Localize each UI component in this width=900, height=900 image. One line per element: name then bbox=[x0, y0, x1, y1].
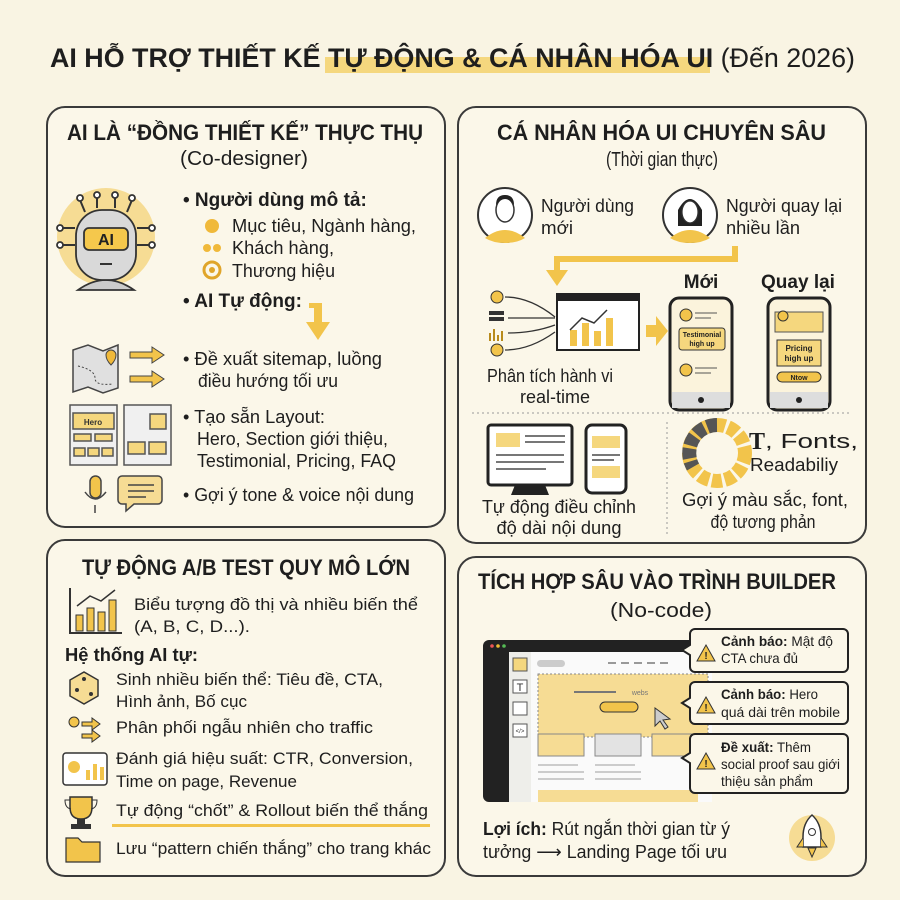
text: variants: Sinh nhiều biến thể: Tiêu đề, CTA, bbox=[116, 670, 383, 689]
icon: trophy bbox=[65, 797, 97, 829]
phone: new bbox=[670, 272, 732, 410]
text: returning user: Người quay lại bbox=[726, 196, 842, 216]
text: variants: Hình ảnh, Bố cục bbox=[116, 692, 247, 711]
heading: builder bbox=[478, 569, 836, 622]
text: layouts: Testimonial, Pricing, FAQ bbox=[197, 451, 396, 471]
icon: AI robot bbox=[57, 188, 155, 290]
callout: hero warning bbox=[682, 682, 848, 724]
text: behaviour analysis bbox=[487, 366, 613, 407]
text: rollout: Tự động “chốt” & Rollout biến thể thắng bbox=[116, 801, 428, 820]
heading: co-designer: AI LÀ “ĐỒNG THIẾT KẾ” THỰC THỤ bbox=[67, 120, 423, 145]
icon: arrows bbox=[130, 347, 164, 387]
builder mockup: </> bbox=[516, 729, 525, 735]
text: distribute: Phân phối ngẫu nhiên cho traffic bbox=[116, 718, 374, 737]
icon: chart bbox=[70, 588, 122, 633]
panel: A/B testing bbox=[47, 540, 445, 876]
callout: hero warning: quá dài trên mobile bbox=[721, 704, 840, 720]
builder mockup: T bbox=[517, 682, 524, 694]
panel: builder integration bbox=[458, 557, 866, 876]
text: sitemap: điều hướng tối ưu bbox=[198, 371, 338, 391]
text: evaluate: Đánh giá hiệu suất: CTR, Conversion, bbox=[116, 749, 413, 768]
text: layouts bbox=[183, 407, 396, 471]
heading: co-designer bbox=[67, 120, 423, 170]
builder mockup bbox=[483, 640, 712, 802]
text: fonts: , Fonts, bbox=[765, 431, 858, 453]
icon: new user bbox=[478, 188, 532, 243]
arrow: to phones bbox=[646, 316, 668, 346]
icon: dice bbox=[70, 672, 98, 704]
text: layouts: • Tạo sẵn Layout: bbox=[183, 407, 325, 427]
text: variants bbox=[116, 670, 383, 711]
text: user describes: • Người dùng mô tả: bbox=[183, 190, 367, 211]
phone: returning: Pricing bbox=[785, 344, 813, 353]
callout: CTA warning bbox=[682, 629, 848, 672]
phone: new: high up bbox=[689, 341, 715, 348]
text: fonts: Gợi ý màu sắc, font, bbox=[682, 489, 848, 510]
builder mockup: webs bbox=[631, 690, 649, 697]
title: AI HỖ TRỢ THIẾT KẾ TỰ ĐỘNG & CÁ NHÂN HÓA UI (Đến 2026) bbox=[50, 42, 855, 73]
callout: suggestion bbox=[682, 734, 848, 793]
callout: hero warning: ! bbox=[704, 703, 708, 714]
text: evaluate bbox=[116, 749, 413, 791]
text: benefit: Lợi ích: Rút ngắn thời gian từ ý bbox=[483, 818, 730, 839]
heading: personalization: CÁ NHÂN HÓA UI CHUYÊN SÂU bbox=[497, 120, 826, 145]
text: AI system: Hệ thống AI tự: bbox=[65, 645, 198, 665]
heading: builder: TÍCH HỢP SÂU VÀO TRÌNH BUILDER bbox=[478, 569, 836, 594]
callout: hero warning: Cảnh báo: Hero bbox=[721, 686, 818, 702]
icon: distribute bbox=[69, 717, 100, 742]
text: behaviour analysis: real-time bbox=[520, 387, 590, 407]
text: chart: (A, B, C, D...). bbox=[134, 617, 250, 636]
text: auto length bbox=[482, 497, 636, 538]
icon: colour wheel bbox=[689, 425, 745, 481]
text: returning user bbox=[726, 196, 842, 238]
text: new user bbox=[541, 196, 634, 238]
panel: personalization bbox=[458, 107, 866, 543]
callout: suggestion: social proof sau giới bbox=[721, 756, 840, 772]
icon: layouts: Hero bbox=[84, 418, 102, 427]
text: user describes bbox=[183, 190, 416, 281]
text: user describes: Mục tiêu, Ngành hàng, bbox=[232, 216, 416, 236]
text: returning user: nhiều lần bbox=[726, 218, 800, 238]
text: AI auto: • AI Tự động: bbox=[183, 291, 302, 312]
heading: personalization bbox=[497, 120, 826, 171]
icon: map bbox=[73, 345, 118, 393]
phone: returning: Quay lại bbox=[761, 272, 835, 293]
text: user describes: Khách hàng, bbox=[232, 238, 334, 258]
text: new user: mới bbox=[541, 218, 573, 238]
arrow: down bbox=[306, 303, 330, 340]
text: auto length: độ dài nội dung bbox=[496, 518, 622, 538]
text: fonts bbox=[682, 429, 858, 532]
text: fonts: T bbox=[749, 429, 765, 455]
heading: personalization: (Thời gian thực) bbox=[606, 149, 718, 171]
callout: suggestion: thiệu sản phẩm bbox=[721, 773, 813, 789]
callout: CTA warning: Cảnh báo: Mật độ bbox=[721, 633, 833, 649]
panel: co-designer bbox=[47, 107, 445, 527]
arrow: bent bbox=[546, 246, 735, 286]
text: behaviour analysis: Phân tích hành vi bbox=[487, 366, 613, 386]
icon: returning user bbox=[663, 188, 717, 243]
text: sitemap bbox=[183, 349, 382, 391]
icon: monitor and phone bbox=[488, 425, 626, 495]
phone: new: Testimonial bbox=[683, 332, 721, 339]
icon: dashboard bbox=[63, 753, 107, 785]
text: evaluate: Time on page, Revenue bbox=[116, 772, 297, 791]
icon: mic and chat bbox=[85, 476, 162, 513]
text: chart bbox=[134, 595, 418, 636]
text: tone: • Gợi ý tone & voice nội dung bbox=[183, 485, 414, 505]
icon: rocket bbox=[789, 815, 835, 861]
phone: returning: Ntow bbox=[790, 375, 808, 382]
callout: CTA warning: ! bbox=[704, 651, 708, 662]
text: chart: Biểu tượng đồ thị và nhiều biến thể bbox=[134, 595, 418, 614]
text: benefit bbox=[483, 818, 730, 862]
text: fonts: độ tương phản bbox=[710, 512, 816, 532]
heading: builder: (No-code) bbox=[610, 600, 712, 622]
heading: co-designer: (Co-designer) bbox=[180, 148, 308, 170]
phone: returning: high up bbox=[785, 354, 814, 363]
text: layouts: Hero, Section giới thiệu, bbox=[197, 429, 388, 449]
text: sitemap: • Đề xuất sitemap, luồng bbox=[183, 349, 382, 369]
icon: AI robot: AI bbox=[98, 232, 114, 249]
phone: returning bbox=[761, 272, 835, 410]
text: save pattern: Lưu “pattern chiến thắng” cho trang khác bbox=[116, 839, 432, 858]
icon: folder bbox=[66, 838, 100, 862]
callout: suggestion: ! bbox=[704, 759, 708, 770]
callout: CTA warning: CTA chưa đủ bbox=[721, 650, 798, 666]
text: benefit: tưởng ⟶ Landing Page tối ưu bbox=[483, 842, 727, 862]
text: auto length: Tự động điều chỉnh bbox=[482, 497, 636, 517]
text: rollout bbox=[112, 801, 430, 827]
text: user describes: Thương hiệu bbox=[232, 261, 335, 281]
icon: analytics bbox=[489, 291, 639, 356]
phone: new: Mới bbox=[684, 272, 718, 293]
text: new user: Người dùng bbox=[541, 196, 634, 216]
heading: A/B: TỰ ĐỘNG A/B TEST QUY MÔ LỚN bbox=[82, 555, 410, 580]
callout: suggestion: Đề xuất: Thêm bbox=[721, 739, 811, 755]
text: fonts: Readabiliy bbox=[750, 455, 838, 475]
icon: layouts bbox=[70, 405, 171, 465]
